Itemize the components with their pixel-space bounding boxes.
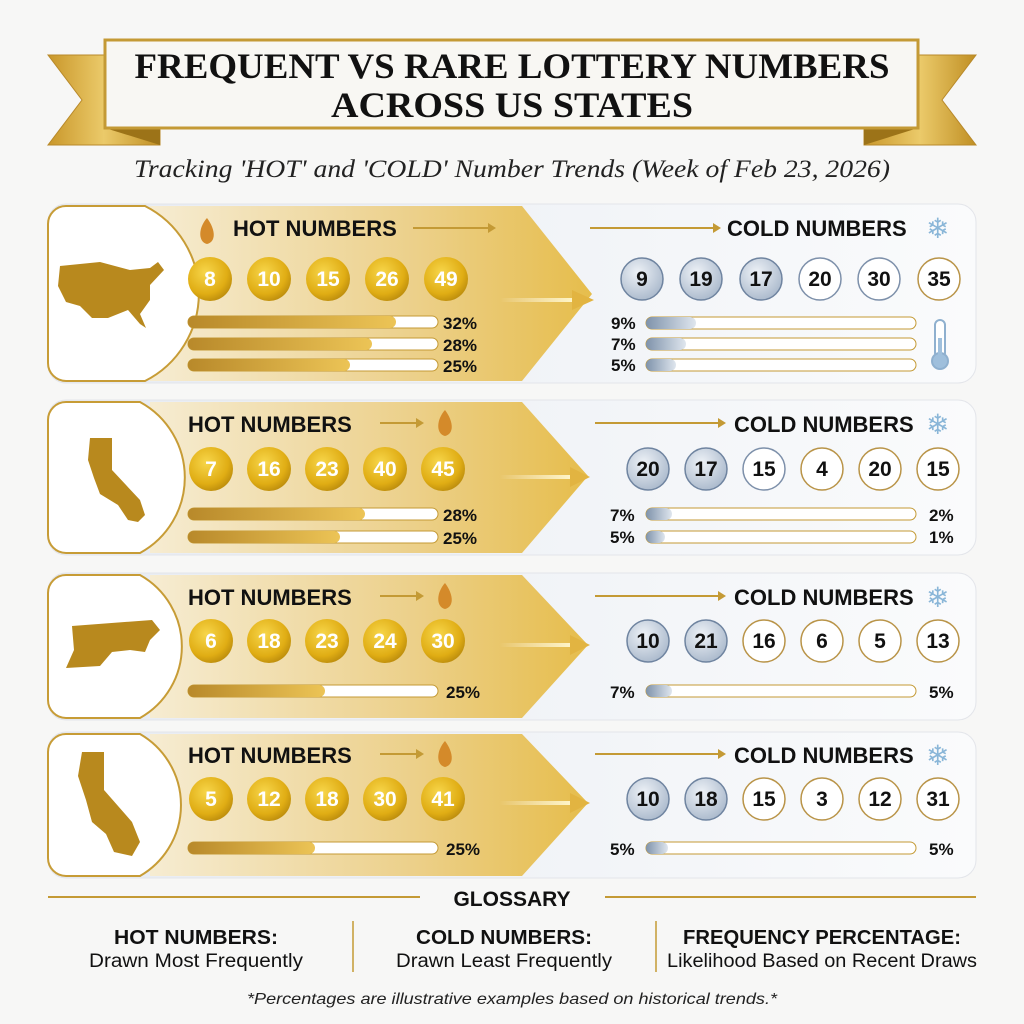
hot balls: 24 bbox=[373, 630, 397, 653]
hot bars: 32% bbox=[443, 314, 477, 333]
hot bar: 25% bbox=[446, 683, 480, 702]
hot balls bbox=[189, 777, 465, 821]
hot bars bbox=[188, 314, 477, 376]
cold header: ❄ bbox=[926, 581, 949, 614]
hot balls: 45 bbox=[431, 458, 455, 481]
map: North Carolina bbox=[66, 620, 160, 668]
cold bars: 5% bbox=[611, 356, 636, 375]
glossary: cold bbox=[396, 927, 613, 972]
hot bars bbox=[188, 506, 477, 548]
cold bars: 9% bbox=[611, 314, 636, 333]
cold bar: 7% bbox=[610, 683, 635, 702]
cold bar bbox=[610, 683, 954, 702]
map: US bbox=[58, 262, 164, 328]
cold header: ❄ bbox=[926, 408, 949, 441]
cold balls: 20 bbox=[808, 268, 832, 291]
hot header bbox=[200, 216, 496, 244]
cold balls: 18 bbox=[694, 788, 718, 811]
cold balls: 16 bbox=[752, 630, 776, 653]
icon: thermometer bbox=[932, 320, 948, 369]
cold balls bbox=[627, 620, 959, 662]
cold header: COLD NUMBERS bbox=[734, 743, 914, 768]
cold header: COLD NUMBERS bbox=[734, 585, 914, 610]
cold balls: 17 bbox=[694, 458, 718, 481]
hot bars: 25% bbox=[443, 529, 477, 548]
panel 2: California bbox=[48, 400, 976, 555]
arrow glow bbox=[500, 635, 590, 655]
hot balls: 18 bbox=[315, 788, 339, 811]
hot header bbox=[188, 583, 452, 610]
cold bar: 5% bbox=[929, 840, 954, 859]
hot balls: 10 bbox=[257, 268, 281, 291]
cold balls: 13 bbox=[926, 630, 950, 653]
subtitle: Tracking 'HOT' and 'COLD' Number Trends (Week of Feb 23, 2026) bbox=[134, 156, 890, 183]
cold header bbox=[595, 581, 949, 614]
glossary: GLOSSARY bbox=[453, 888, 571, 911]
cold balls: 31 bbox=[926, 788, 950, 811]
cold balls bbox=[627, 778, 959, 820]
glossary: cold: Drawn Least Frequently bbox=[396, 951, 613, 972]
hot bar bbox=[188, 840, 480, 859]
hot bars: 28% bbox=[443, 506, 477, 525]
cold balls: 6 bbox=[816, 630, 828, 653]
cold header: ❄ bbox=[926, 212, 949, 245]
cold balls: 5 bbox=[874, 630, 886, 653]
hot header: HOT NUMBERS bbox=[188, 743, 352, 768]
hot balls: 12 bbox=[257, 788, 281, 811]
glossary: frequency bbox=[667, 927, 977, 972]
glossary: hot: HOT NUMBERS: bbox=[114, 927, 278, 949]
cold bars: 5% bbox=[610, 528, 635, 547]
cold balls: 21 bbox=[694, 630, 718, 653]
map: California bbox=[88, 438, 145, 522]
footnote: *Percentages are illustrative examples based on historical trends.* bbox=[247, 991, 778, 1008]
hot bars: 25% bbox=[443, 357, 477, 376]
title banner: ACROSS US STATES bbox=[331, 85, 693, 125]
hot balls: 30 bbox=[373, 788, 397, 811]
cold balls: 15 bbox=[752, 458, 776, 481]
cold balls: 30 bbox=[867, 268, 891, 291]
panel 4: California bbox=[48, 732, 976, 878]
hot balls: 49 bbox=[434, 268, 458, 291]
hot balls: 18 bbox=[257, 630, 281, 653]
cold bar: 5% bbox=[610, 840, 635, 859]
cold balls: 9 bbox=[636, 268, 648, 291]
glossary bbox=[48, 888, 977, 972]
arrow glow bbox=[500, 290, 594, 310]
hot balls: 5 bbox=[205, 788, 217, 811]
hot balls bbox=[188, 257, 468, 301]
map: California bbox=[78, 752, 140, 856]
cold header: ❄ bbox=[926, 739, 949, 772]
hot header: HOT NUMBERS bbox=[188, 412, 352, 437]
panel 1: US bbox=[48, 204, 976, 383]
arrow glow bbox=[500, 793, 590, 813]
cold bars bbox=[610, 506, 954, 547]
hot balls: 6 bbox=[205, 630, 217, 653]
cold bars: 7% bbox=[610, 506, 635, 525]
hot balls bbox=[189, 447, 465, 491]
cold balls: 35 bbox=[927, 268, 951, 291]
glossary: hot: Drawn Most Frequently bbox=[89, 951, 304, 972]
glossary: frequency: FREQUENCY PERCENTAGE: bbox=[683, 927, 961, 949]
hot bars: 28% bbox=[443, 336, 477, 355]
cold balls: 20 bbox=[868, 458, 892, 481]
title banner bbox=[48, 40, 976, 145]
glossary: hot bbox=[89, 927, 304, 972]
hot bar bbox=[188, 683, 480, 702]
cold balls: 17 bbox=[749, 268, 773, 291]
hot balls: 8 bbox=[204, 268, 216, 291]
cold balls: 4 bbox=[816, 458, 828, 481]
hot balls: 23 bbox=[315, 630, 339, 653]
hot balls: 30 bbox=[431, 630, 455, 653]
hot balls: 41 bbox=[431, 788, 455, 811]
title banner: FREQUENT VS RARE LOTTERY NUMBERS bbox=[134, 46, 890, 86]
cold balls: 20 bbox=[636, 458, 660, 481]
cold header: COLD NUMBERS bbox=[727, 216, 907, 241]
hot balls: 40 bbox=[373, 458, 397, 481]
cold bars: 7% bbox=[611, 335, 636, 354]
panel 3: North Carolina bbox=[48, 573, 976, 720]
hot balls: 15 bbox=[316, 268, 340, 291]
cold balls: 10 bbox=[636, 788, 660, 811]
cold bars: 1% bbox=[929, 528, 954, 547]
cold header: COLD NUMBERS bbox=[734, 412, 914, 437]
hot balls: 26 bbox=[375, 268, 399, 291]
cold header bbox=[590, 212, 949, 245]
hot balls: 23 bbox=[315, 458, 339, 481]
arrow glow bbox=[500, 467, 590, 487]
cold balls: 12 bbox=[868, 788, 892, 811]
hot balls: 16 bbox=[257, 458, 281, 481]
cold bar bbox=[610, 840, 954, 859]
hot header bbox=[188, 410, 452, 437]
cold balls: 19 bbox=[689, 268, 713, 291]
cold bars: 2% bbox=[929, 506, 954, 525]
cold bars bbox=[611, 314, 916, 375]
glossary: frequency: Likelihood Based on Recent Draws bbox=[667, 951, 977, 972]
cold balls: 10 bbox=[636, 630, 660, 653]
hot bar: 25% bbox=[446, 840, 480, 859]
cold balls: 3 bbox=[816, 788, 828, 811]
hot header: HOT NUMBERS bbox=[233, 216, 397, 241]
cold header bbox=[595, 739, 949, 772]
hot header bbox=[188, 741, 452, 768]
hot balls bbox=[189, 619, 465, 663]
cold balls: 15 bbox=[752, 788, 776, 811]
cold bar: 5% bbox=[929, 683, 954, 702]
cold balls: 15 bbox=[926, 458, 950, 481]
hot header: HOT NUMBERS bbox=[188, 585, 352, 610]
cold header bbox=[595, 408, 949, 441]
cold balls bbox=[621, 258, 960, 300]
cold balls bbox=[627, 448, 959, 490]
hot balls: 7 bbox=[205, 458, 217, 481]
glossary: cold: COLD NUMBERS: bbox=[416, 927, 592, 949]
